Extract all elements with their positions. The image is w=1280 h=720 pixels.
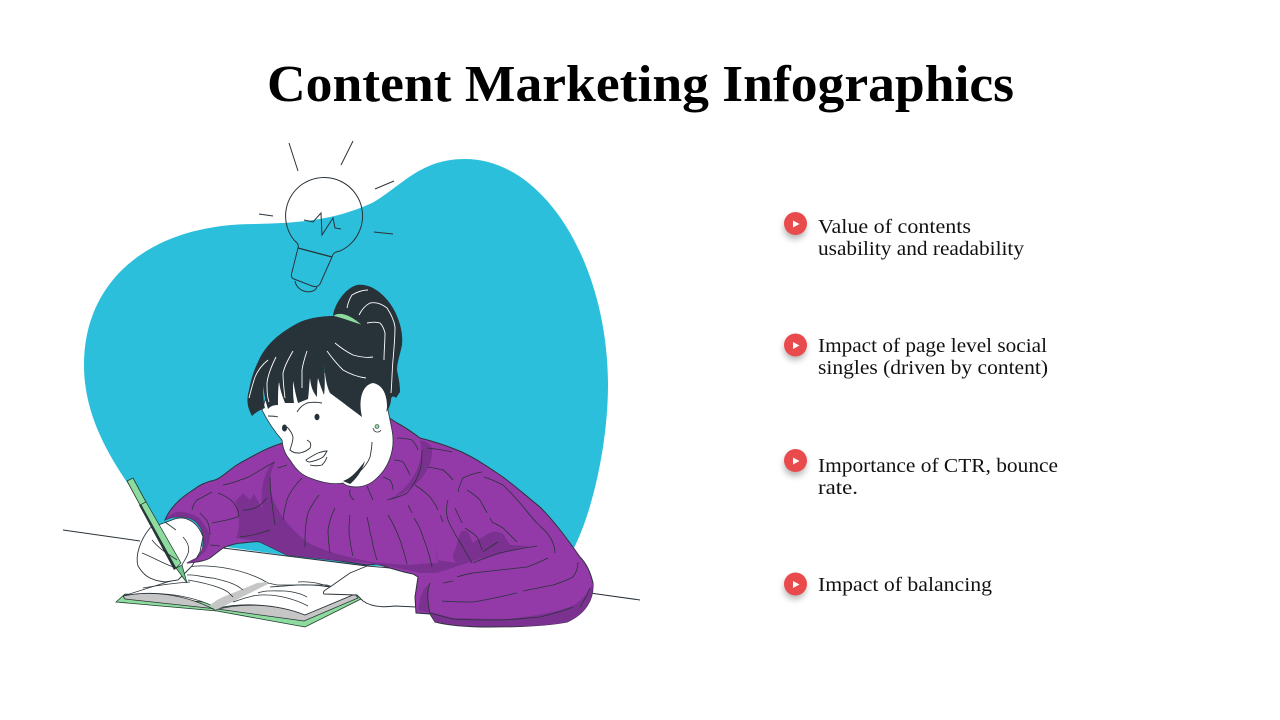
sweater shadows xyxy=(165,440,593,626)
bullet 1: usability and readability xyxy=(818,238,1025,260)
bullet 3: rate. xyxy=(818,477,858,499)
left page xyxy=(123,566,268,608)
book gutter shadow xyxy=(210,582,268,610)
illustration: woman writing with lightbulb idea xyxy=(63,141,640,627)
pen xyxy=(127,478,187,583)
notebook xyxy=(116,566,363,627)
earring xyxy=(373,424,381,432)
bullet 4 xyxy=(784,572,992,599)
notebook cover xyxy=(116,590,363,627)
bullet 1 xyxy=(784,212,1025,260)
face features xyxy=(268,402,372,477)
lightbulb xyxy=(259,141,394,292)
resting hand xyxy=(323,566,420,607)
writing hand xyxy=(137,518,203,582)
desk surface xyxy=(180,544,420,612)
table line xyxy=(63,530,640,600)
page scribbles xyxy=(143,575,330,606)
bullet 2 xyxy=(784,334,1048,379)
bullet 3: Importance of CTR, bounce xyxy=(818,455,1058,477)
title: Content Marketing Infographics xyxy=(267,56,1014,113)
hair band xyxy=(333,314,362,325)
hair xyxy=(247,285,402,417)
sweater fold lines xyxy=(192,438,590,620)
bullet 4: Impact of balancing xyxy=(818,574,992,596)
bullet list xyxy=(784,212,1058,599)
ear xyxy=(360,383,387,427)
chin shadow xyxy=(343,461,365,484)
bullet 2: Impact of page level social xyxy=(818,335,1047,357)
right page xyxy=(219,583,355,615)
sweater xyxy=(165,415,593,627)
notebook page edges xyxy=(123,593,358,621)
bullet 2: singles (driven by content) xyxy=(818,357,1048,379)
blue blob background xyxy=(84,159,608,575)
hair highlights xyxy=(249,290,395,402)
hand finger lines xyxy=(142,522,189,568)
head and neck xyxy=(247,285,402,487)
bullet 3 xyxy=(784,449,1058,499)
bullet 1: Value of contents xyxy=(818,216,971,238)
